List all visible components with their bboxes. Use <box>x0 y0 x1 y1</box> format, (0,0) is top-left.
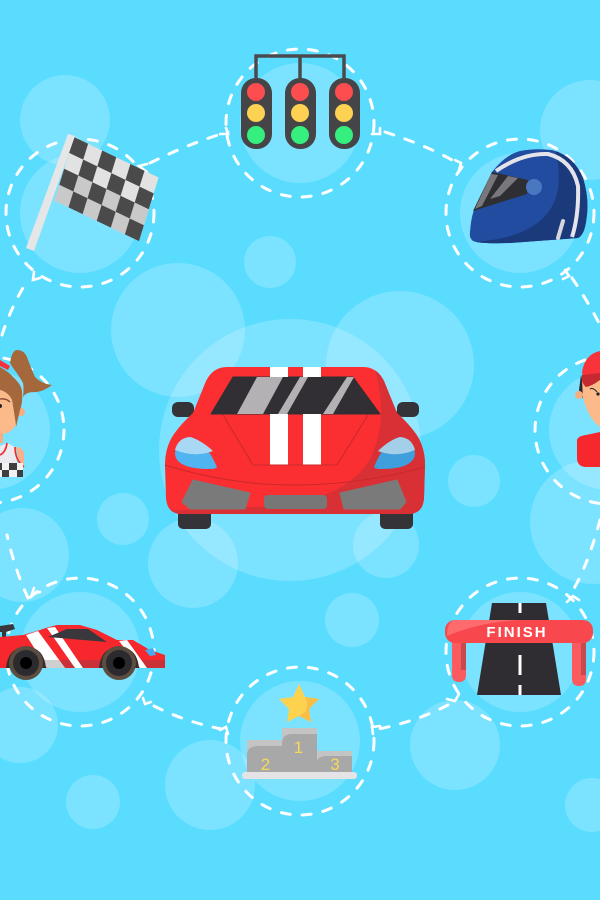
hood and bumper lines <box>165 415 425 485</box>
route junction ticks <box>32 128 579 734</box>
icon: girl driver <box>0 350 52 477</box>
icon: checkered flag <box>26 134 159 251</box>
icon: race car <box>0 624 165 680</box>
white racing stripes <box>270 367 321 465</box>
icon: winners podium <box>242 684 357 779</box>
body shading <box>171 370 425 514</box>
mirrors <box>172 402 419 418</box>
wheels <box>178 505 413 529</box>
central red sports car <box>160 360 430 529</box>
icon: winners podium: 1 <box>294 738 303 757</box>
icon: finish gate: FINISH <box>486 624 548 641</box>
icon: winners podium: 2 <box>261 755 270 774</box>
car body <box>165 367 425 514</box>
grilles <box>182 480 406 509</box>
windshield <box>211 377 380 414</box>
headlights <box>175 437 217 469</box>
icon: traffic lights <box>241 56 360 149</box>
icon: mechanic driver <box>575 351 600 467</box>
windshield stripes <box>237 377 354 414</box>
icon: helmet <box>470 149 588 244</box>
icon: finish gate <box>445 603 593 695</box>
icon: winners podium: 3 <box>330 755 340 774</box>
